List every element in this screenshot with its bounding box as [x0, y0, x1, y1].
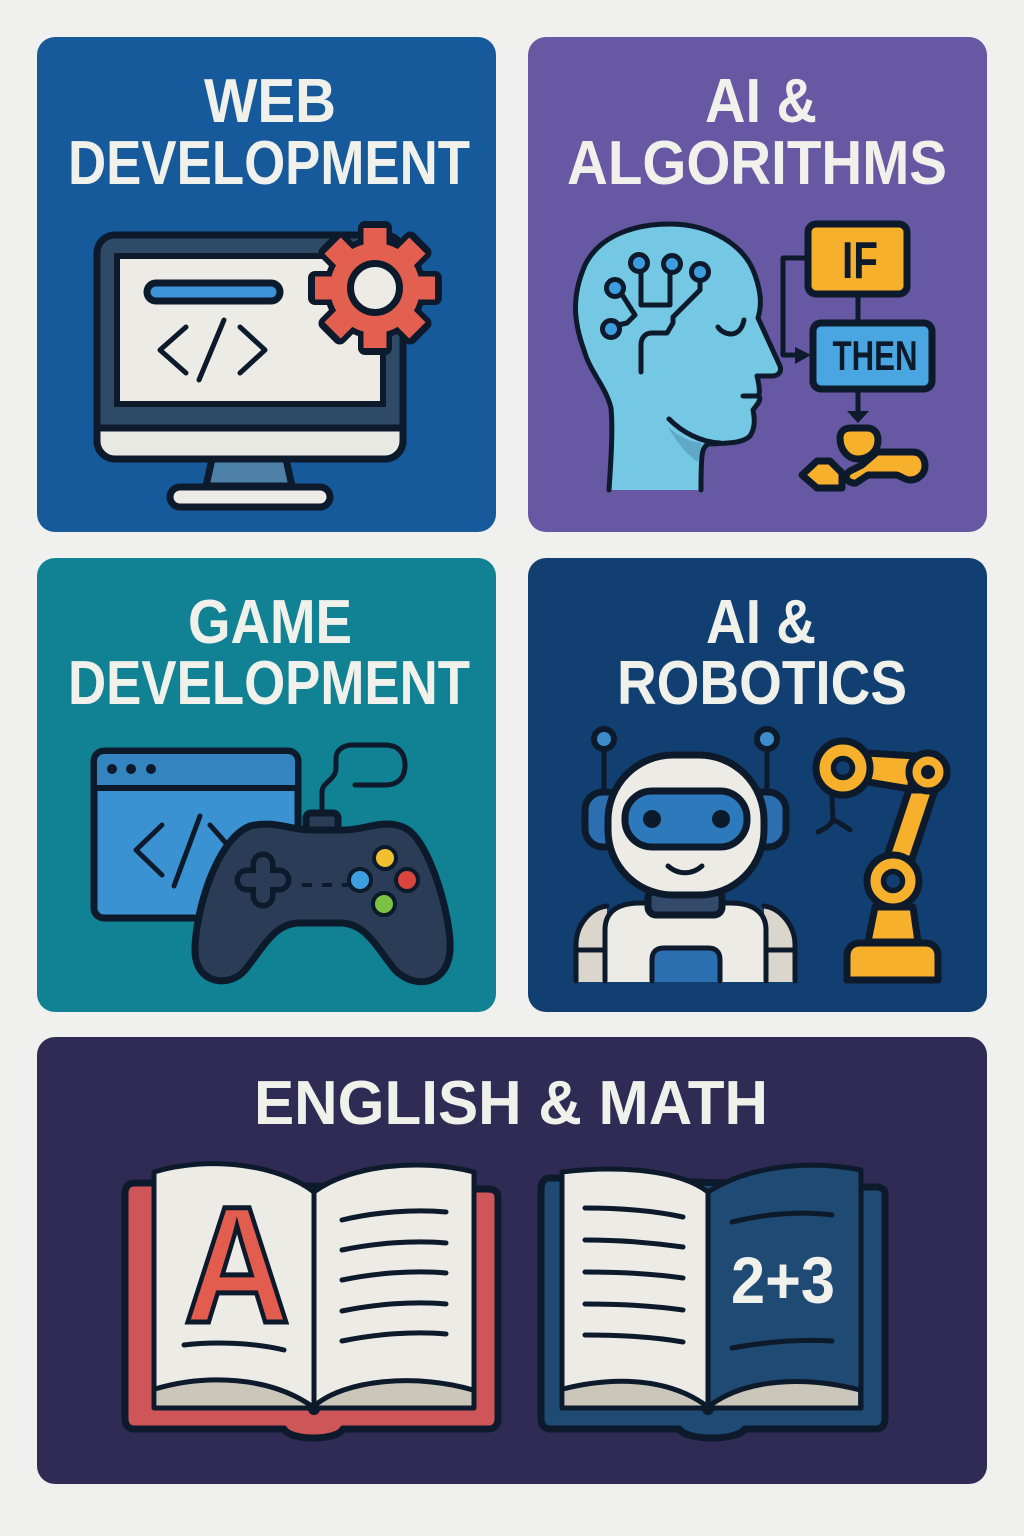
icon: english book: [125, 1164, 498, 1438]
icon: if then flowchart: IF: [842, 232, 878, 290]
heading: game development: GAME: [188, 588, 352, 657]
panel: web development: [37, 37, 496, 532]
panel: ai and algorithms: [528, 37, 987, 532]
icon: robotic arm: [816, 741, 947, 980]
heading: web development: WEB: [204, 67, 336, 136]
icon: game controller: [195, 745, 450, 982]
heading: ai and robotics: AI &: [706, 588, 816, 657]
panel: game development: [37, 558, 496, 1012]
panel: english and math: [37, 1037, 987, 1484]
math text: 2+3: [731, 1243, 835, 1317]
icon: robot: [576, 729, 795, 982]
heading: ai and algorithms: AI &: [705, 67, 817, 136]
icon: if then flowchart: [783, 224, 932, 488]
icon: math book: [541, 1165, 885, 1438]
panel: ai and robotics: [528, 558, 987, 1012]
heading: game development: DEVELOPMENT: [68, 649, 470, 718]
heading: english and math: ENGLISH & MATH: [254, 1069, 768, 1138]
icon: if then flowchart: THEN: [832, 332, 918, 379]
icon: browser window with code: [94, 751, 298, 918]
heading: ai and algorithms: ALGORITHMS: [567, 129, 947, 198]
letter A: A: [184, 1173, 290, 1358]
icon: head with circuit: [576, 224, 781, 490]
heading: ai and robotics: ROBOTICS: [617, 649, 907, 718]
icon: monitor with code and gear: [97, 221, 442, 507]
heading: web development: DEVELOPMENT: [68, 129, 470, 198]
